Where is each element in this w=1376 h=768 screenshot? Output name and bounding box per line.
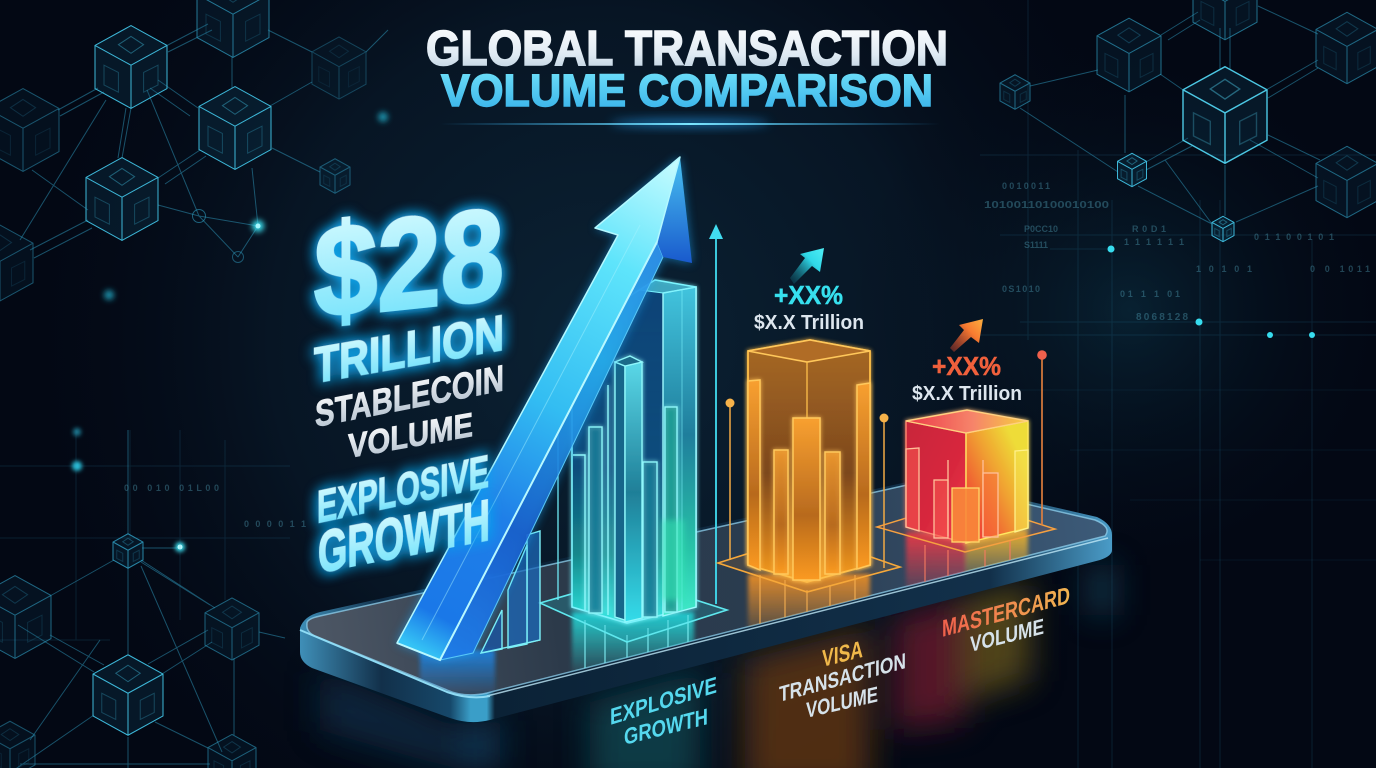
blockchain network: top right: [1000, 0, 1376, 242]
background data readouts: 0 0 1011: [1310, 264, 1370, 274]
floor reflections: [320, 565, 1114, 768]
stablecoin bar chart: [481, 280, 727, 653]
visa pins: [726, 398, 888, 568]
background data readouts: 8068128: [1136, 312, 1188, 323]
background data readouts: 01 1 1 01: [1120, 289, 1180, 299]
background data readouts: R0D1: [1132, 224, 1166, 234]
up arrow: orange: [950, 319, 983, 352]
background data readouts: 10100110100010100: [984, 200, 1110, 211]
right dots: [1108, 246, 1315, 338]
explosive: EXPLOSIVE: [317, 446, 489, 533]
background data readouts: 1 0 1 0 1: [1196, 264, 1252, 274]
background data readouts: 0010011: [1002, 181, 1050, 191]
arrow side face: [440, 242, 663, 660]
title line 2: VOLUME COMPARISON: [441, 65, 933, 116]
label: explosive growth: [610, 672, 717, 750]
mastercard base frame: [877, 500, 1055, 552]
arrow glow: [397, 157, 692, 660]
mastercard inner bars: [906, 448, 1028, 542]
mastercard percentage: +XX%: [932, 351, 1001, 381]
up arrow: cyan: [790, 248, 824, 284]
base frame: [540, 578, 727, 642]
label: visa transaction volume: VOLUME: [806, 682, 878, 723]
trillion: TRILLION: [314, 304, 504, 394]
hero arrow: [397, 157, 692, 660]
visa base frame: [718, 535, 900, 592]
label: visa transaction volume: VISA: [822, 636, 863, 673]
label: explosive growth: GROWTH: [624, 703, 708, 750]
headline stat: [314, 180, 504, 586]
label: mastercard volume: VOLUME: [970, 614, 1044, 657]
label: visa transaction volume: [779, 636, 906, 723]
visa orange bar: [718, 340, 900, 592]
background data readouts: S1111: [1024, 240, 1048, 250]
visa percentage: +XX%: [774, 280, 843, 310]
label: mastercard volume: MASTERCARD: [942, 582, 1070, 643]
platform slab: [300, 480, 1112, 722]
label: explosive growth: EXPLOSIVE: [610, 672, 717, 730]
background data readouts: 1 1 1 1 1 1: [1124, 237, 1184, 247]
inner bars: [573, 356, 677, 622]
main cyan column: [572, 280, 696, 623]
visa box: [748, 340, 870, 582]
tall cyan bar: [663, 287, 696, 616]
mastercard pin: [1037, 350, 1047, 525]
volume: VOLUME: [348, 406, 473, 466]
mastercard box: [906, 410, 1028, 543]
blockchain network: bottom left: [0, 428, 285, 768]
left small bars: [481, 531, 540, 653]
mastercard red bar: [877, 350, 1055, 552]
visa inner bars: [748, 380, 870, 580]
visa growth callout: [754, 248, 864, 334]
$28: $28: [314, 180, 504, 346]
surface reflections: [420, 530, 1028, 698]
background data readouts: [124, 181, 1370, 529]
growth: GROWTH: [318, 488, 490, 586]
label: visa transaction volume: TRANSACTION: [779, 648, 906, 707]
mastercard growth callout: [912, 319, 1022, 405]
left thin line: [557, 432, 559, 600]
mastercard value: $X.X Trillion: [912, 383, 1022, 405]
title underline: [440, 119, 940, 127]
background data readouts: P0CC10: [1024, 224, 1058, 234]
background data readouts: 0 1 1 0 0 1 0 1: [1254, 232, 1334, 242]
stablecoin: STABLECOIN: [315, 357, 504, 435]
label: mastercard volume: [942, 582, 1070, 657]
arrow front face: [397, 157, 680, 660]
platform surface: [307, 483, 1107, 695]
arrow head side: [657, 157, 692, 263]
thin cyan growth arrow: [709, 224, 723, 604]
background data readouts: 00 010 01L00: [124, 483, 219, 493]
background data readouts: 0S1010: [1002, 284, 1040, 294]
blockchain network: top left: [0, 0, 388, 301]
title line 1: GLOBAL TRANSACTION: [426, 22, 948, 76]
platform: [300, 480, 1112, 722]
background data readouts: 0 0 0 0 1 1: [244, 519, 306, 529]
visa value: $X.X Trillion: [754, 312, 864, 334]
title: [426, 22, 948, 127]
